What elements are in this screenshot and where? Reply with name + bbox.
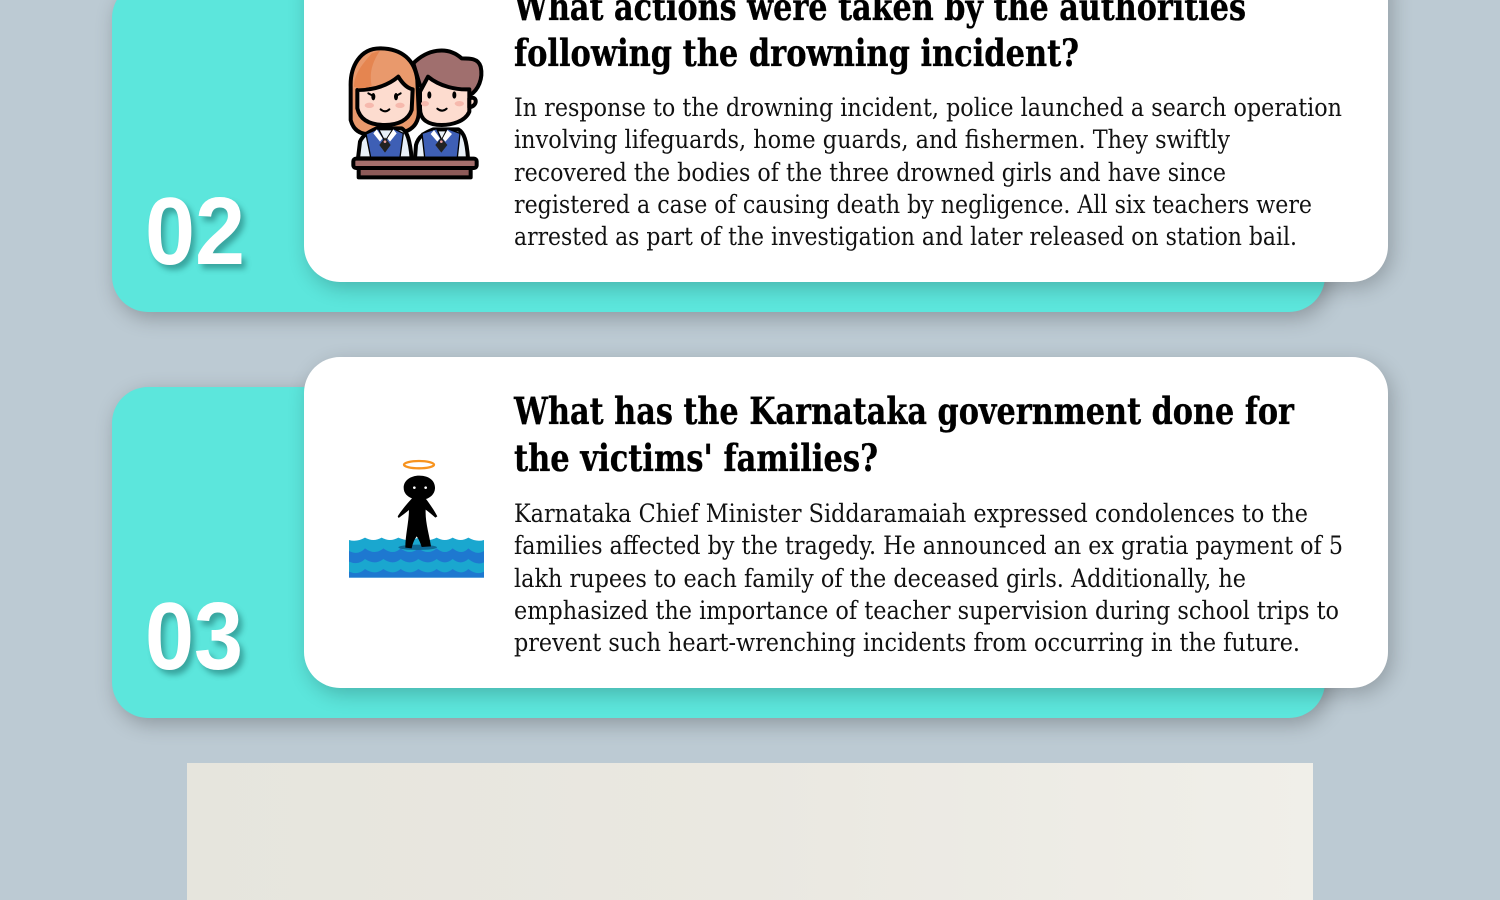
faces	[365, 101, 464, 108]
photo placeholder at bottom	[187, 763, 1313, 900]
body text 03: emphasized the importance of teacher supervision during school trips to	[514, 596, 1339, 626]
icon: two students at a desk	[348, 46, 484, 180]
body text 03: prevent such heart-wrenching incidents from occurring in the future.	[514, 628, 1300, 658]
icon: figure with halo standing in water	[349, 460, 484, 578]
body text 03: lakh rupees to each family of the deceased girls. Additionally, he	[514, 564, 1246, 594]
body text 03: families affected by the tragedy. He announced an ex gratia payment of 5	[514, 531, 1343, 561]
body text 03: Karnataka Chief Minister Siddaramaiah expressed condolences to the	[514, 499, 1308, 529]
white card 03	[304, 357, 1388, 688]
panel: question 02	[106, 0, 1402, 328]
heading 03: the victims' families?	[514, 436, 878, 480]
body text 02: arrested as part of the investigation and later released on station bail.	[514, 222, 1297, 252]
body text 02	[514, 93, 1342, 252]
number 03: 03	[145, 583, 243, 690]
white card 02	[304, 0, 1388, 282]
teal backing panel 02	[112, 0, 1325, 312]
teal backing panel 03	[112, 387, 1325, 718]
body text 02: In response to the drowning incident, police launched a search operation	[514, 93, 1342, 123]
body text 02: registered a case of causing death by negligence. All six teachers were	[514, 190, 1312, 220]
heading 03: What has the Karnataka government done for	[513, 389, 1294, 433]
panel: question 03	[106, 354, 1402, 734]
body text 03	[514, 499, 1343, 658]
heading 02: following the drowning incident?	[514, 31, 1079, 75]
number 02: 02	[145, 178, 245, 285]
heading 02	[513, 0, 1246, 75]
body text 02: recovered the bodies of the three drowned girls and have since	[514, 158, 1226, 188]
body text 02: involving lifeguards, home guards, and fishermen. They swiftly	[514, 125, 1231, 155]
heading 03	[513, 389, 1294, 480]
